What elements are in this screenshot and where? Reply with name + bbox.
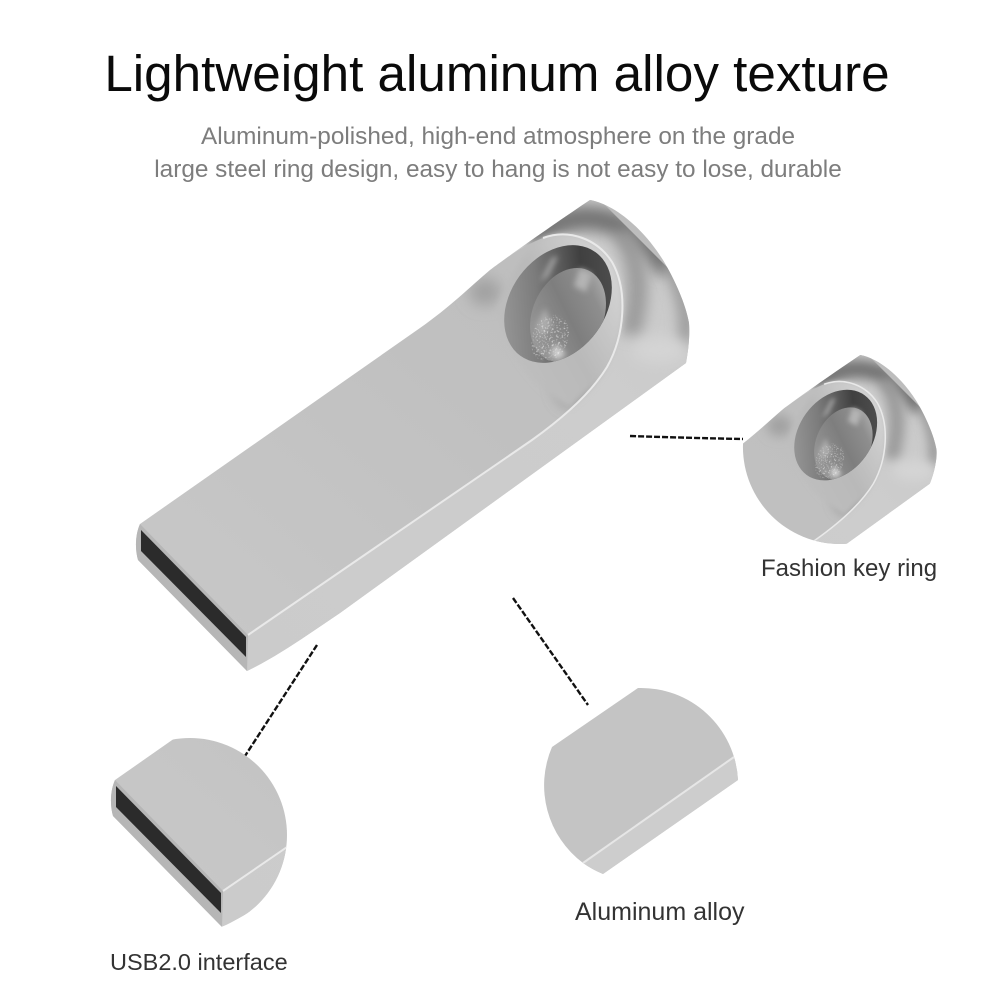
drive body <box>120 190 710 680</box>
drive end face <box>136 524 248 671</box>
callout line: USB interface <box>245 645 317 756</box>
detail: aluminum alloy <box>544 688 738 874</box>
detail: USB interface <box>110 738 287 927</box>
alloy body <box>544 688 738 874</box>
subtitle text: large steel ring design, easy to hang is not easy to lose, durable <box>154 156 842 183</box>
label: aluminum alloy: Aluminum alloy <box>575 898 745 926</box>
callout line: key ring <box>630 436 743 439</box>
key ring inner wall <box>516 256 620 374</box>
alloy highlight <box>583 757 734 863</box>
fold highlight <box>248 234 622 635</box>
detail: key ring <box>743 355 937 544</box>
key ring hole <box>482 224 634 384</box>
label: key ring: Fashion key ring <box>761 555 937 582</box>
soft shadow by fold <box>555 358 589 406</box>
shoulder shading <box>530 218 688 364</box>
subtitle text <box>154 123 842 183</box>
recess ring <box>497 234 622 408</box>
callout line: aluminum alloy <box>513 598 588 705</box>
subtitle text: Aluminum-polished, high-end atmosphere on the grade <box>201 123 795 150</box>
label: USB interface: USB2.0 interface <box>110 949 288 975</box>
drive bevel and ring shoulder <box>247 190 700 680</box>
USB port opening <box>141 530 246 657</box>
product illustrations <box>110 200 937 927</box>
drive top face <box>120 190 710 680</box>
alloy bevel <box>583 757 738 874</box>
title: Lightweight aluminum alloy texture <box>104 45 890 102</box>
soft shadow left of recess <box>469 278 501 306</box>
main USB drive <box>120 190 710 680</box>
